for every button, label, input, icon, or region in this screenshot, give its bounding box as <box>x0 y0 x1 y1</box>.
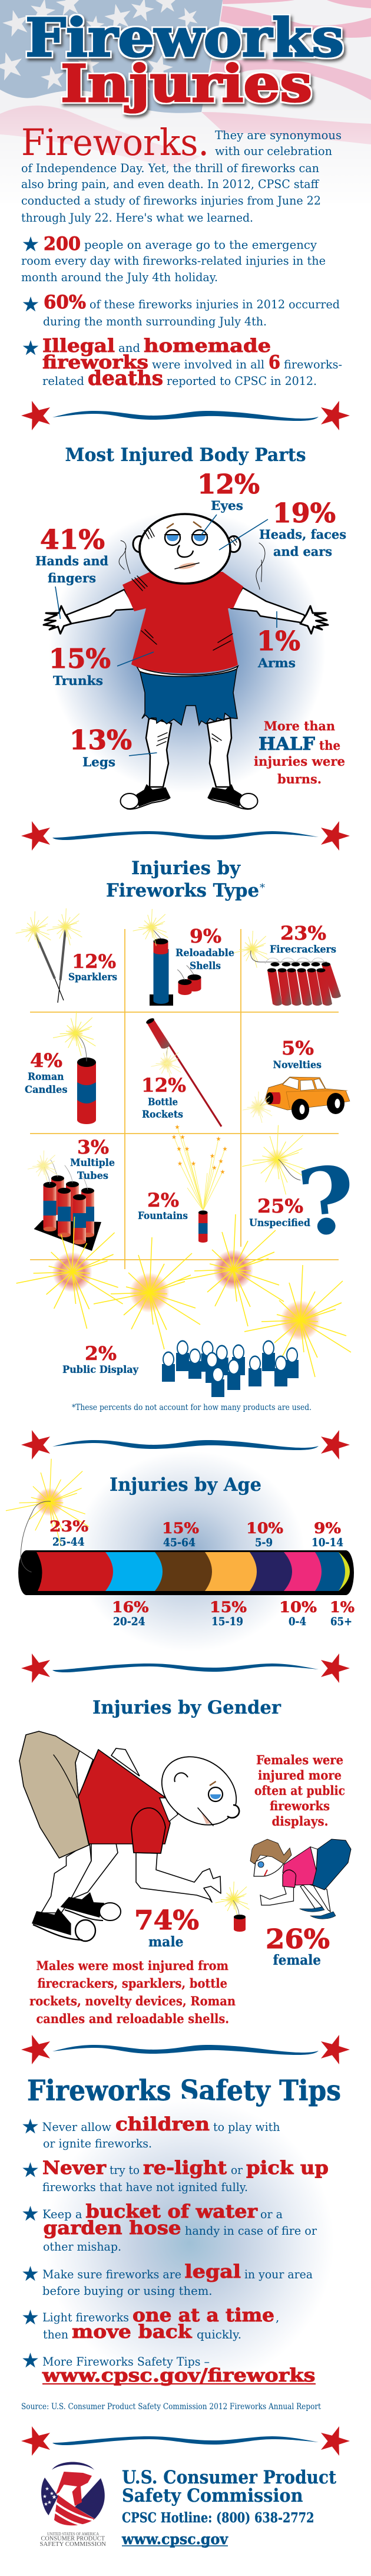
shoes <box>32 1892 121 1941</box>
flag stars <box>0 0 203 94</box>
fact text: 6 <box>269 352 280 373</box>
intro text block <box>21 121 342 225</box>
logo navy wedge <box>75 2478 105 2519</box>
head <box>133 536 146 552</box>
stat: hands: Hands and <box>35 554 108 568</box>
intro paragraph: conducted a study of fireworks injuries from June 22 <box>21 193 321 207</box>
stat: legs: 13% <box>69 724 132 756</box>
eyebrow <box>210 1781 216 1786</box>
intro paragraph: of Independence Day. Yet, the thrill of fireworks can <box>21 161 319 175</box>
fact text <box>43 297 340 328</box>
tip text <box>42 2201 317 2254</box>
stat: 60%: 60% <box>44 292 86 313</box>
logo flag canton <box>41 2478 58 2515</box>
website: www.cpsc.gov <box>121 2531 228 2548</box>
tip text: handy in case of fire or <box>185 2223 317 2238</box>
bursts <box>16 1214 351 1377</box>
tip text: or <box>231 2163 243 2177</box>
shorts <box>19 1731 89 1858</box>
tip text: move back <box>72 2321 193 2343</box>
logo flag stripes <box>52 2495 95 2525</box>
label: 9% <box>190 925 221 947</box>
chart: age firecracker bar <box>6 1459 355 1628</box>
age labels: 25-44 <box>52 1536 85 1549</box>
icon: star bullet <box>23 297 38 311</box>
fact text <box>21 238 326 284</box>
stat: trunks <box>49 643 111 688</box>
tip text: quickly. <box>197 2327 241 2341</box>
arm <box>260 1886 293 1905</box>
age labels: 1% <box>330 1599 355 1616</box>
stat: female: female <box>273 1952 321 1968</box>
age labels: 15% <box>162 1520 199 1537</box>
callout: females: Females were <box>256 1753 343 1767</box>
panel: public display: Public Display <box>62 1364 139 1376</box>
stat: male: 74% <box>134 1905 199 1936</box>
age labels: 65+ <box>330 1615 352 1628</box>
icon: star bullet <box>22 2119 38 2133</box>
age labels: 15% <box>210 1599 247 1616</box>
icon: star bullet <box>22 2310 38 2324</box>
icon: sparklers <box>16 908 82 1003</box>
right hand <box>300 606 328 634</box>
age labels: 10% <box>279 1599 317 1616</box>
divider 2 <box>21 821 350 851</box>
sleeve <box>131 1808 165 1853</box>
footnote: *These percents do not account for how many products are used. <box>72 1403 312 1412</box>
divider 3 <box>21 1430 350 1460</box>
panel: reloadable shells <box>133 909 234 1006</box>
legs <box>146 718 171 787</box>
icon: multiple tubes <box>28 1151 101 1251</box>
title <box>25 6 344 114</box>
tip text: fireworks that have not ignited fully. <box>42 2180 248 2194</box>
panel: public display <box>16 1214 351 1412</box>
callout: burns <box>254 719 345 786</box>
age labels: 5-9 <box>255 1536 273 1549</box>
icon: firecrackers <box>234 931 341 1006</box>
stat: trunks: 15% <box>49 643 111 674</box>
icon: question mark: ? <box>293 1144 361 1258</box>
intro paragraph: through July 22. Here's what we learned. <box>21 210 253 225</box>
tip text: one at a time <box>132 2305 274 2326</box>
panel: sparklers: Sparklers <box>68 971 117 983</box>
fact text: deaths <box>88 367 163 390</box>
label: 12% <box>72 950 116 973</box>
fact text: homemade <box>144 335 271 357</box>
icon: fountain spray <box>172 1125 227 1243</box>
tip text <box>42 2114 280 2150</box>
divider 4 <box>21 1653 350 1683</box>
age labels: 20-24 <box>113 1615 145 1628</box>
tip text: bucket of water <box>86 2201 258 2222</box>
logo arc <box>52 2462 94 2470</box>
source note: Source: U.S. Consumer Product Safety Commission 2012 Fireworks Annual Report <box>21 2402 321 2412</box>
panel: novelties: Novelties <box>273 1059 322 1071</box>
age labels: 0-4 <box>289 1615 306 1628</box>
fact text: fireworks <box>42 352 148 373</box>
shoes <box>120 785 170 809</box>
bar segments <box>24 1552 350 1591</box>
title: Injuries: Injuries <box>61 54 312 114</box>
stat: hands: fingers <box>48 571 96 585</box>
panel: multiple tubes: Multiple <box>70 1157 115 1169</box>
section heading: fireworks type <box>106 858 265 901</box>
callout: burns: the <box>319 738 340 753</box>
tip text: other mishap. <box>43 2239 121 2254</box>
label: 5% <box>281 1037 314 1059</box>
tip 6 <box>22 2353 316 2386</box>
left hand <box>44 606 71 634</box>
age labels: 9% <box>314 1520 341 1537</box>
tip text: before buying or using them. <box>42 2284 212 2298</box>
shirt <box>78 1750 170 1844</box>
logo eagle <box>55 2472 92 2506</box>
tip text: Never <box>42 2157 107 2179</box>
waist <box>310 1847 317 1870</box>
label: 25% <box>257 1195 303 1217</box>
agency name: U.S. Consumer Product <box>122 2467 337 2488</box>
divider 6 <box>21 2426 350 2456</box>
tip text <box>42 2157 329 2194</box>
panel: body parts glow <box>49 510 326 793</box>
section heading: safety tips: Fireworks Safety Tips <box>27 2074 341 2107</box>
label: 4% <box>30 1049 62 1072</box>
mouth <box>201 1813 212 1824</box>
waist <box>75 1751 93 1798</box>
illustration: female figure <box>250 1839 351 1919</box>
stat: female <box>266 1923 330 1968</box>
hotline: CPSC Hotline: (800) 638-2772 <box>122 2510 314 2526</box>
callout: females: displays. <box>272 1814 329 1829</box>
tip text: try to <box>110 2163 140 2177</box>
stat: legs <box>69 724 132 769</box>
fact text: fireworks- <box>284 357 342 371</box>
head <box>148 1742 250 1839</box>
illustration: man <box>44 514 328 809</box>
divider 5 <box>21 2035 350 2064</box>
shirt <box>122 572 243 673</box>
tip text: children <box>115 2114 210 2135</box>
icon: bottle rocket <box>145 1017 221 1126</box>
stat: arms: Arms <box>257 655 296 670</box>
icon: shells <box>178 966 201 995</box>
section heading: fireworks type: Injuries by <box>131 858 241 879</box>
left arm <box>67 589 135 624</box>
panel: firecrackers <box>234 922 341 1006</box>
icon: star bullet <box>23 340 38 355</box>
icon: mortar tube <box>133 909 173 1006</box>
callout: females <box>254 1753 345 1829</box>
stat: legs: Legs <box>82 755 115 769</box>
fact text: Illegal <box>42 335 115 357</box>
legs <box>305 1883 330 1912</box>
divider 1 <box>21 401 350 430</box>
section heading: gender: Injuries by Gender <box>92 1697 281 1718</box>
shoes <box>299 1907 324 1912</box>
logo wordmark: SAFETY COMMISSION <box>40 2541 106 2548</box>
face <box>254 1854 284 1876</box>
fuse burst <box>6 1459 89 1546</box>
label: 12% <box>141 1074 186 1096</box>
heat wisps <box>119 541 265 589</box>
icon: fuse burst <box>242 1125 308 1195</box>
tip 4 <box>22 2261 313 2298</box>
callout: burns: injuries were <box>254 754 345 769</box>
panel: reloadable shells: Shells <box>190 960 221 972</box>
stat: heads: and ears <box>273 544 332 559</box>
panel: roman candles: Candles <box>25 1084 67 1096</box>
fact text: and <box>118 341 140 355</box>
tip text: More Fireworks Safety Tips – <box>42 2354 210 2369</box>
callout: burns: HALF <box>259 734 315 755</box>
panel: age glow <box>75 1451 304 1652</box>
illustration: male figure <box>19 1731 250 1941</box>
callout: burns: More than <box>264 719 335 733</box>
ear <box>174 1773 188 1782</box>
age labels: 23% <box>49 1518 88 1535</box>
logo wordmark: CONSUMER PRODUCT <box>41 2536 105 2542</box>
shirt <box>283 1847 316 1885</box>
tip 1 <box>22 2114 280 2150</box>
tip text: re-light <box>143 2157 227 2179</box>
panel: reloadable shells: Reloadable <box>175 947 234 959</box>
callout: females: often at public <box>254 1783 345 1798</box>
eyebrows <box>167 522 201 528</box>
legs <box>41 1842 91 1913</box>
fact text: of these fireworks injuries in 2012 occurred <box>90 297 340 311</box>
flag stripes <box>0 0 371 168</box>
logo stars <box>43 2486 57 2506</box>
right arm <box>231 588 308 624</box>
flag header background <box>0 0 371 168</box>
tip text: garden hose <box>44 2218 181 2239</box>
icon: car <box>242 1077 350 1123</box>
intro paragraph: with our celebration <box>215 144 332 158</box>
panel: fountains: Fountains <box>138 1210 188 1222</box>
age labels: 15-19 <box>211 1615 243 1628</box>
panel: sparklers <box>16 908 117 1003</box>
tip text: www.cpsc.gov/fireworks <box>42 2365 316 2386</box>
flag canton <box>0 0 223 113</box>
panel: bottle rockets: Bottle <box>148 1096 178 1108</box>
stat: eyes: 12% <box>197 469 260 500</box>
logo wordmark: UNITED STATES OF AMERICA <box>47 2532 99 2537</box>
stat: hands: 41% <box>40 524 105 555</box>
tip text: legal <box>185 2261 241 2282</box>
fact text: were involved in all <box>152 357 264 371</box>
fact text: people on average go to the emergency <box>84 238 317 252</box>
panel: roman candles <box>25 1011 96 1124</box>
fact: illegal fireworks deaths <box>23 335 342 390</box>
panel: bottle rockets: Rockets <box>142 1109 183 1121</box>
icon: star bullet <box>23 236 38 251</box>
stat: 200: 200 <box>44 233 81 255</box>
callout: females: fireworks <box>270 1798 330 1813</box>
section heading: fireworks type: * <box>260 882 265 894</box>
age labels: 16% <box>112 1599 149 1616</box>
contact block: Safety Commission <box>122 2485 303 2506</box>
fact text: during the month surrounding July 4th. <box>43 314 267 328</box>
stat: heads: 19% <box>273 498 336 529</box>
tip text: in your area <box>244 2267 313 2281</box>
fuse <box>21 1501 51 1572</box>
fact text <box>42 335 342 390</box>
panel: unspecified: Unspecified <box>249 1217 310 1229</box>
callout: females: injured more <box>258 1768 342 1783</box>
tip text: Make sure fireworks are <box>42 2267 181 2281</box>
shirt hem <box>137 666 238 677</box>
stat: male: male <box>148 1934 184 1950</box>
panel: firecrackers: Firecrackers <box>270 944 336 956</box>
shorts <box>140 669 237 725</box>
tip text: Never allow <box>42 2120 111 2134</box>
stat: heads <box>259 498 346 559</box>
front arm <box>136 1853 221 1902</box>
panel: multiple tubes <box>28 1136 115 1251</box>
section heading: body parts: Most Injured Body Parts <box>65 444 306 466</box>
tip 3 <box>22 2201 317 2254</box>
panel: bottle rockets <box>141 1017 221 1126</box>
stat: arms: 1% <box>257 625 300 657</box>
intro paragraph: They are synonymous <box>215 128 342 142</box>
tip 2 <box>22 2157 329 2194</box>
icon: star bullet <box>22 2353 38 2367</box>
neck <box>160 1798 178 1821</box>
stat: arms <box>257 625 300 670</box>
tip text: or a <box>260 2207 283 2221</box>
intro drop word: Fireworks. <box>21 121 209 164</box>
tip text <box>42 2305 279 2343</box>
fact: 60 percent <box>23 292 340 328</box>
stat: male <box>134 1905 199 1950</box>
stat: eyes: Eyes <box>211 498 243 513</box>
icon: roman candle <box>53 1011 96 1124</box>
contact block <box>121 2467 337 2548</box>
eye and mouth <box>258 1862 264 1867</box>
fact text: month around the July 4th holiday. <box>21 270 218 284</box>
label: 2% <box>147 1189 179 1211</box>
panel: fountains <box>138 1125 227 1243</box>
panel: novelties <box>242 1037 350 1123</box>
fact text: related <box>42 374 84 388</box>
callout: males: candles and reloadable shells. <box>37 2011 229 2026</box>
panel: roman candles: Roman <box>28 1071 64 1083</box>
firecracker icon <box>216 1882 250 1932</box>
section heading: fireworks type: Fireworks Type <box>106 880 259 901</box>
tip text: or ignite fireworks. <box>43 2136 152 2150</box>
panel: tips glow <box>45 2099 334 2387</box>
title: Fireworks: Fireworks <box>25 6 344 68</box>
nose <box>178 545 193 557</box>
stat: trunks: Trunks <box>53 673 103 688</box>
stat: hands <box>35 524 108 585</box>
fact text: reported to CPSC in 2012. <box>167 374 317 388</box>
logo: CPSC <box>40 2462 106 2548</box>
hair <box>250 1839 292 1864</box>
icon: star bullet <box>22 2162 38 2177</box>
sleeve <box>283 1870 296 1887</box>
callout: burns: burns. <box>277 772 322 786</box>
bar casing <box>18 1550 354 1595</box>
stat: female: 26% <box>266 1923 330 1955</box>
stat: heads: Heads, faces <box>259 527 346 542</box>
intro paragraph <box>21 128 342 225</box>
tip text: pick up <box>246 2157 329 2179</box>
panel: unspecified <box>242 1125 361 1258</box>
tip text: , <box>276 2310 279 2324</box>
callout lines <box>55 515 277 756</box>
fact: 200 people <box>21 233 326 284</box>
age labels <box>49 1518 355 1628</box>
icon: star bullet <box>22 2266 38 2281</box>
age labels: 45-64 <box>163 1536 196 1549</box>
fact text: room every day with fireworks-related injuries in the <box>21 253 326 268</box>
tip text <box>42 2261 313 2298</box>
label: 2% <box>85 1342 117 1365</box>
callout: males: rockets, novelty devices, Roman <box>29 1994 236 2008</box>
callout: males <box>29 1958 236 2026</box>
tip text: Light fireworks <box>42 2310 129 2324</box>
pants <box>306 1839 351 1890</box>
callout: males: firecrackers, sparklers, bottle <box>38 1976 227 1991</box>
tip text: then <box>43 2327 68 2341</box>
tip text: Keep a <box>42 2207 82 2221</box>
tip text <box>42 2354 316 2386</box>
label: 3% <box>77 1136 109 1158</box>
callout: males: Males were most injured from <box>37 1958 228 1973</box>
section heading: age: Injuries by Age <box>110 1474 261 1495</box>
age labels: 10% <box>246 1520 283 1537</box>
icon: star bullet <box>22 2206 38 2221</box>
intro paragraph: also bring pain, and even death. In 2012, CPSC staff <box>21 177 320 191</box>
tip 5 <box>22 2305 279 2343</box>
icon: crowd <box>162 1340 299 1397</box>
eye <box>208 1787 223 1801</box>
label: 23% <box>280 922 326 944</box>
tip text: to play with <box>213 2120 280 2134</box>
nose <box>227 1805 239 1818</box>
grid lines <box>30 929 339 1269</box>
panel: multiple tubes: Tubes <box>77 1170 108 1182</box>
eyes <box>165 530 180 545</box>
back arm <box>111 1748 140 1776</box>
mouth <box>178 561 197 571</box>
logo wordmark <box>40 2532 106 2548</box>
age labels: 10-14 <box>312 1536 343 1549</box>
